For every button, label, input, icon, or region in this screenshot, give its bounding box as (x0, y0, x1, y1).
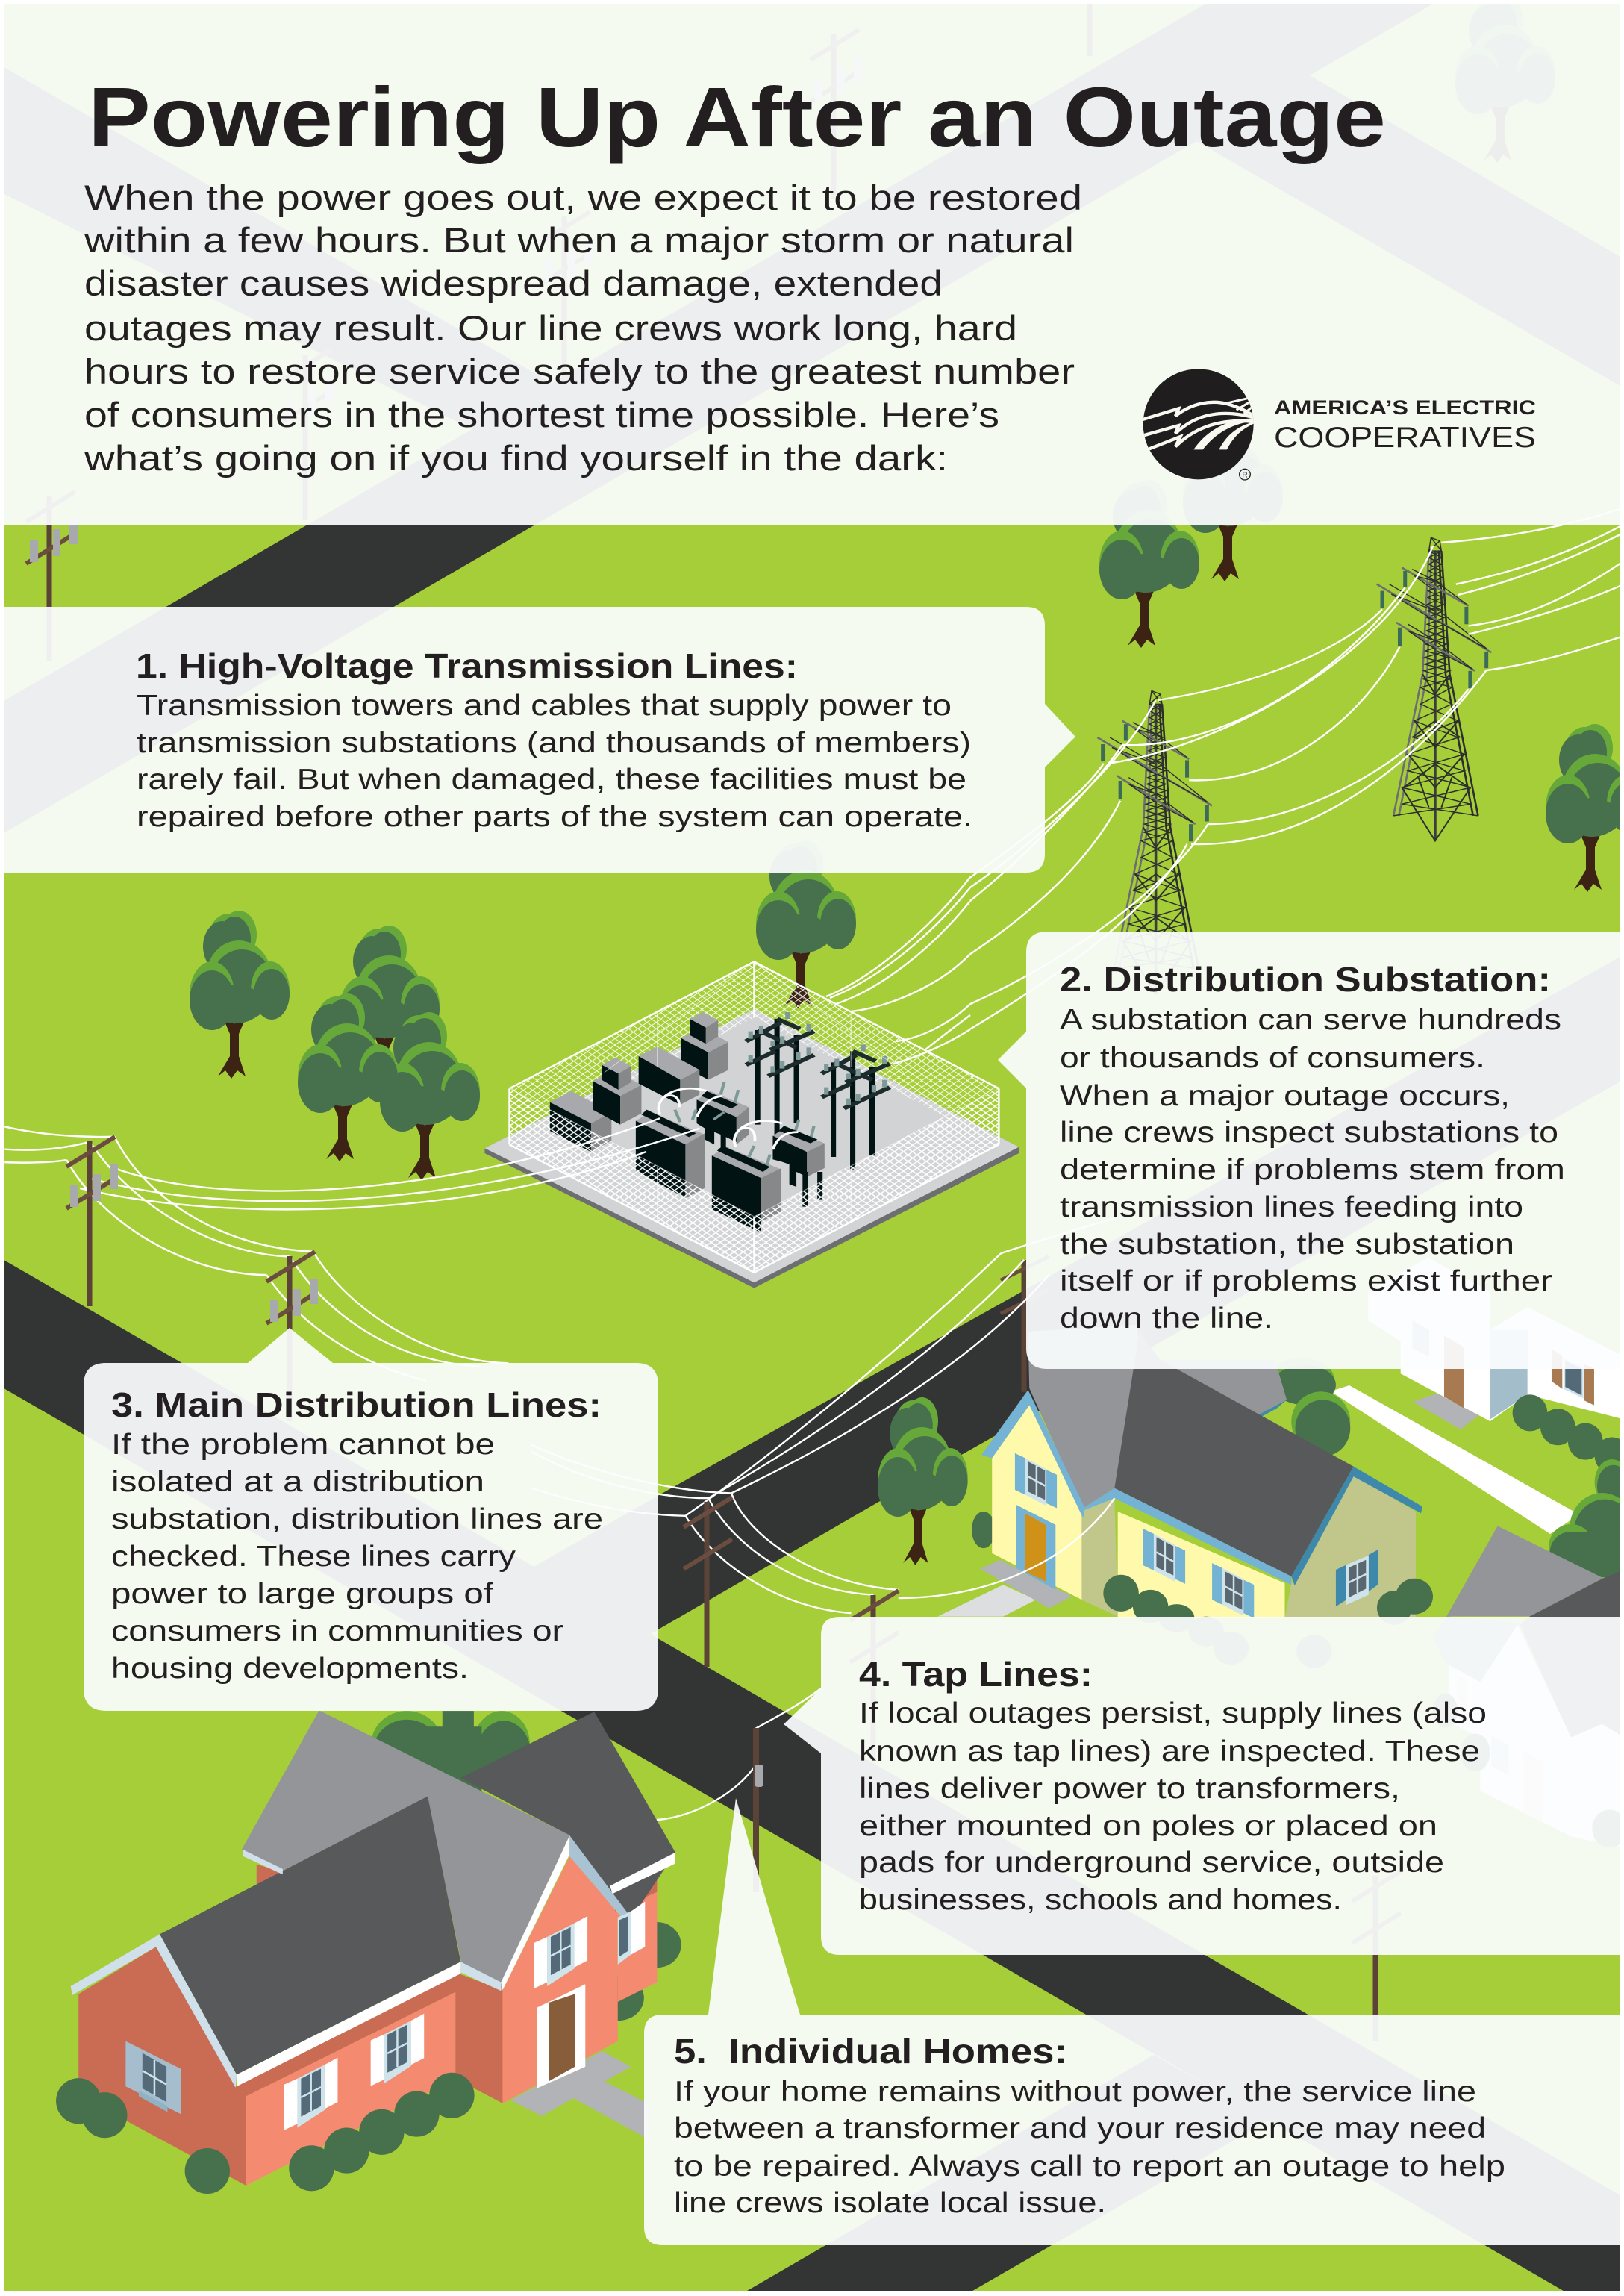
body: housing developments. (111, 1653, 469, 1685)
body: If local outages persist, supply lines (also (859, 1697, 1487, 1729)
intro paragraph (84, 178, 1082, 478)
substation (484, 961, 1019, 1288)
tree: beside yellow house (878, 1397, 968, 1565)
tree: top center (1099, 525, 1199, 648)
body: transmission substations (and thousands of members) (137, 727, 971, 759)
card shape with pointer (644, 1798, 1620, 2245)
body: rarely fail. But when damaged, these facilities must be (137, 764, 966, 796)
pole road 3 (684, 1497, 732, 1667)
intro paragraph: outages may result. Our line crews work long, hard (84, 308, 1017, 348)
body (859, 1697, 1487, 1916)
pole behind yellow house (1001, 1256, 1049, 1392)
body (674, 2076, 1505, 2219)
body: If the problem cannot be (111, 1429, 495, 1461)
heading: 5. Individual Homes: (674, 2032, 1067, 2071)
intro paragraph: hours to restore service safely to the greatest number (84, 352, 1075, 391)
body: If your home remains without power, the service line (674, 2076, 1476, 2108)
pole ghost header a (1066, 0, 1118, 56)
intro paragraph: within a few hours. But when a major storm or natural (84, 220, 1074, 260)
intro paragraph: When the power goes out, we expect it to be restored (84, 178, 1082, 217)
transmission wires (970, 508, 1624, 1029)
logo text line 2: COOPERATIVES (1274, 422, 1536, 454)
tower far (1377, 537, 1491, 840)
tree: cluster left (298, 993, 398, 1161)
tree: behind substation (756, 873, 856, 1008)
wires out of substation to poles (4, 1118, 700, 1381)
body: substation, distribution lines are (111, 1503, 603, 1535)
body: determine if problems stem from (1060, 1154, 1565, 1186)
logo emblem (1142, 369, 1254, 480)
title: Powering Up After an Outage (88, 70, 1386, 164)
pole ghost header b (811, 30, 862, 199)
high-voltage towers (1097, 537, 1491, 994)
tree behind red house (371, 1711, 531, 1797)
panel 3: Main Distribution Lines (84, 1328, 658, 1711)
body (111, 1429, 603, 1685)
equipment (550, 1012, 890, 1233)
white house back right (1368, 1258, 1624, 1473)
heading: 1. High-Voltage Transmission Lines: (136, 646, 798, 685)
body: itself or if problems exist further (1060, 1265, 1552, 1297)
fence front (509, 1088, 754, 1273)
tree: cluster back (342, 926, 440, 1049)
body: down the line. (1060, 1303, 1273, 1335)
tree: ghost top right (1484, 106, 1511, 163)
body: A substation can serve hundreds (1060, 1004, 1561, 1036)
driveway (1331, 1385, 1579, 1534)
panel 5: Individual Homes (644, 1798, 1620, 2245)
body: checked. These lines carry (111, 1541, 516, 1573)
body: businesses, schools and homes. (859, 1884, 1342, 1916)
body: between a transformer and your residence may need (674, 2112, 1486, 2144)
card shape with pointer (784, 1617, 1620, 1955)
floor mesh (613, 1117, 943, 1202)
body (137, 690, 972, 833)
body: power to large groups of (111, 1578, 493, 1610)
red house (56, 1711, 681, 2194)
yellow house (937, 1348, 1422, 1618)
body: to be repaired. Always call to report an outage to help (674, 2150, 1505, 2183)
pole road 5 (850, 1591, 899, 1760)
card shape with pointer (84, 1328, 658, 1711)
pole ghost header d (282, 350, 334, 520)
body: known as tap lines) are inspected. These (859, 1735, 1480, 1768)
body: either mounted on poles or placed on (859, 1810, 1437, 1842)
header panel overlay (4, 4, 1620, 525)
body: lines deliver power to transformers, (859, 1773, 1400, 1805)
logo text line 1: AMERICA’S ELECTRIC (1274, 396, 1536, 419)
intro paragraph: disaster causes widespread damage, extended (84, 263, 943, 303)
tree: far right (1546, 724, 1624, 892)
tree behind yellow house (1278, 1369, 1351, 1455)
panel 4: Tap Lines (784, 1617, 1620, 1955)
wires into substation (826, 877, 970, 1064)
body: isolated at a distribution (111, 1466, 484, 1498)
utility poles (26, 0, 1401, 2041)
trees right of yellow house (1549, 1459, 1624, 1577)
body: When a major outage occurs, (1060, 1080, 1510, 1112)
white house lower right (1433, 1526, 1624, 1848)
body: repaired before other parts of the system can operate. (137, 801, 972, 833)
body: consumers in communities or (111, 1615, 563, 1647)
service drop wire (657, 1688, 821, 1820)
heading: 3. Main Distribution Lines: (111, 1385, 602, 1424)
intro paragraph: what’s going on if you find yourself in the dark: (84, 438, 948, 478)
panel 2: Distribution Substation (998, 932, 1620, 1369)
sidewalk near white house (1413, 1394, 1481, 1429)
logo emblem: R (1242, 471, 1248, 479)
card shape with pointer (998, 932, 1620, 1369)
tower near (1097, 691, 1212, 994)
tree: behind logo (1190, 525, 1239, 581)
wires along the road (531, 1218, 1114, 1613)
pole left 1 (66, 1137, 118, 1306)
body: transmission lines feeding into (1060, 1191, 1523, 1223)
pole lower right (1352, 1871, 1401, 2041)
intro paragraph: of consumers in the shortest time possible. Here’s (84, 395, 999, 434)
panel 1: High-Voltage Transmission Lines (4, 607, 1075, 873)
tree: cluster right (380, 1012, 480, 1180)
logo: America's Electric Cooperatives (1142, 369, 1536, 480)
tree: single left (190, 911, 290, 1079)
fence back (509, 961, 999, 1144)
body (1060, 1004, 1565, 1335)
pole top left (26, 492, 78, 661)
pole left 2 (266, 1252, 318, 1421)
card shape with pointer (4, 607, 1075, 873)
body: Transmission towers and cables that supply power to (137, 690, 952, 722)
body: the substation, the substation (1060, 1229, 1514, 1261)
heading: 4. Tap Lines: (859, 1655, 1093, 1694)
concrete pad (484, 1009, 1019, 1288)
body: line crews inspect substations to (1060, 1117, 1558, 1149)
heading: 2. Distribution Substation: (1060, 960, 1551, 999)
body: pads for underground service, outside (859, 1847, 1444, 1879)
body: or thousands of consumers. (1060, 1042, 1485, 1074)
bushes by yellow house (1377, 1578, 1433, 1618)
pole ghost header c (541, 212, 593, 381)
pole with transformer (755, 1728, 763, 1892)
body: line crews isolate local issue. (674, 2187, 1106, 2219)
